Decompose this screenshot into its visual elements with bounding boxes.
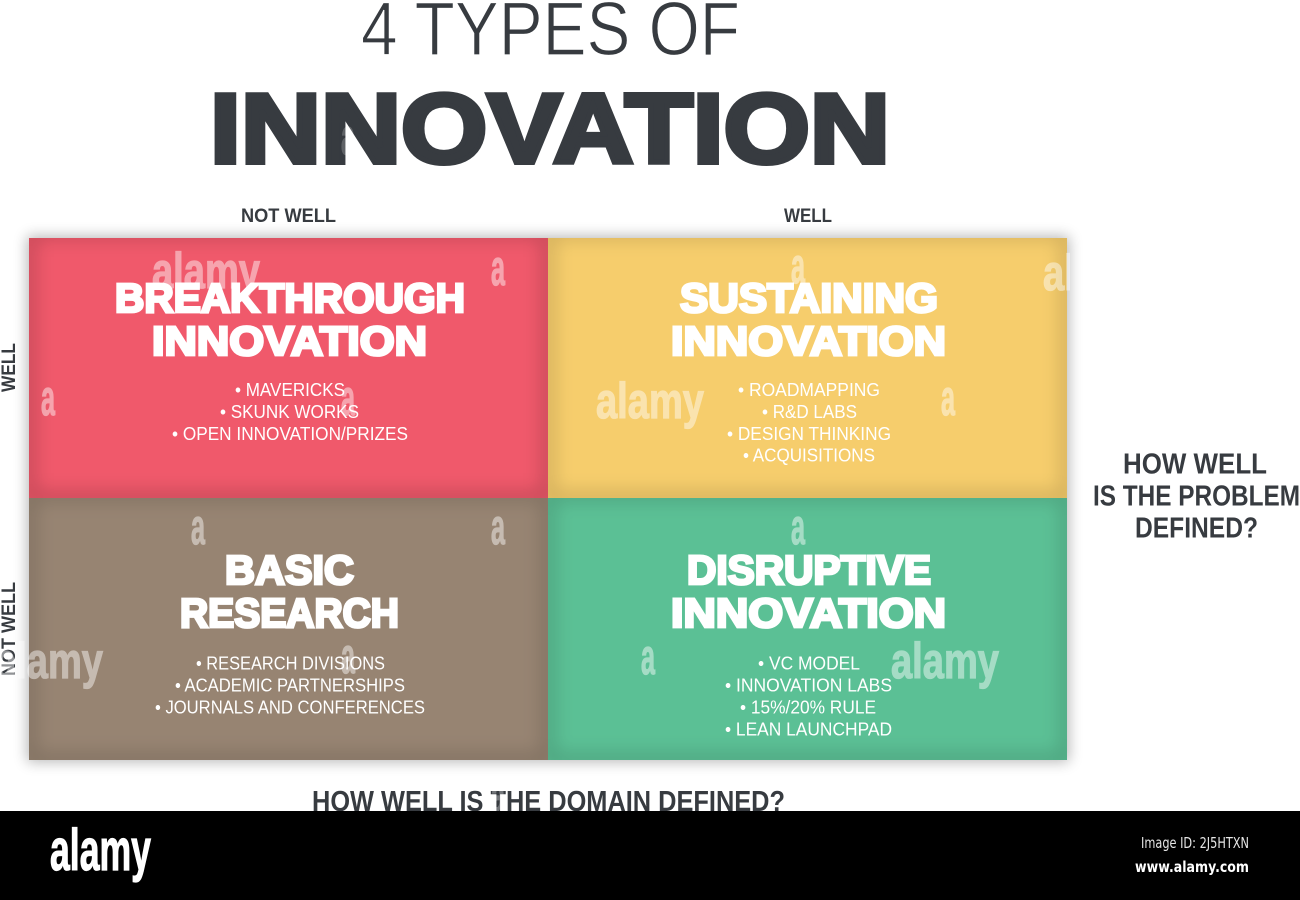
bullet list: breakthrough: • OPEN INNOVATION/PRIZES (172, 424, 408, 444)
bullet list: disruptive: • VC MODEL (758, 654, 860, 674)
stock watermarks: a (341, 109, 356, 165)
panel: breakthrough innovation (29, 232, 548, 498)
stock watermarks: a (491, 499, 506, 555)
heading: disruptive innovation (671, 547, 946, 636)
stock watermarks: a (941, 370, 956, 426)
bullet list: sustaining: • DESIGN THINKING (727, 424, 891, 444)
stock watermarks: a (791, 238, 806, 294)
matrix drop shadow (27, 236, 1069, 762)
footer logo: alamy (50, 818, 151, 883)
bullet list: sustaining (727, 380, 891, 466)
heading: basic research (180, 547, 399, 636)
heading: sustaining innovation: SUSTAINING (680, 275, 938, 321)
panel: sustaining innovation (548, 232, 1067, 498)
heading: breakthrough innovation: BREAKTHROUGH (115, 275, 465, 321)
heading: breakthrough innovation: INNOVATION (152, 318, 427, 364)
bullet list: sustaining: • R&D LABS (762, 402, 857, 422)
right axis question (1093, 448, 1300, 544)
stock watermarks: a (41, 370, 56, 426)
bullet list: disruptive: • LEAN LAUNCHPAD (725, 720, 892, 740)
heading: sustaining innovation (671, 275, 946, 364)
stock watermarks: alamy (1043, 245, 1151, 301)
heading: basic research: BASIC (225, 547, 354, 593)
bullet list: disruptive (725, 654, 892, 740)
stock watermarks: a (491, 240, 506, 296)
top axis label: well: WELL (784, 206, 832, 227)
bullet list: breakthrough: • SKUNK WORKS (220, 402, 359, 422)
bullet list: basic research: • RESEARCH DIVISIONS (196, 654, 385, 674)
right axis question: HOW WELL (1123, 448, 1267, 480)
top axis label: not well: NOT WELL (241, 206, 336, 227)
title line: innovation: INNOVATION (210, 74, 890, 184)
right axis question: DEFINED? (1135, 512, 1258, 544)
bullet list: sustaining: • ACQUISITIONS (743, 446, 875, 466)
stock watermarks: a (791, 499, 806, 555)
stock watermarks: a (641, 629, 656, 685)
heading: disruptive innovation: DISRUPTIVE (687, 547, 931, 593)
bullet list: disruptive: • 15%/20% RULE (740, 698, 876, 718)
stock watermarks: a (491, 767, 506, 823)
stock watermarks: alamy (596, 373, 704, 429)
stock watermarks: alamy (152, 243, 260, 299)
bullet list: basic research: • JOURNALS AND CONFERENCES (155, 698, 425, 718)
bullet list: basic research: • ACADEMIC PARTNERSHIPS (175, 676, 405, 696)
bullet list: sustaining: • ROADMAPPING (738, 380, 880, 400)
bullet list: breakthrough (172, 380, 408, 444)
image id: Image ID: 2J5HTXN (1141, 834, 1249, 852)
stock watermarks: alamy (891, 633, 999, 689)
bullet list: disruptive: • INNOVATION LABS (725, 676, 892, 696)
stock watermarks: a (191, 499, 206, 555)
stock watermarks: a (341, 370, 356, 426)
heading: breakthrough innovation (115, 275, 465, 364)
bottom axis question: HOW WELL IS THE DOMAIN DEFINED? (312, 786, 785, 818)
heading: disruptive innovation: INNOVATION (671, 590, 946, 636)
title (210, 0, 890, 184)
bullet list: breakthrough: • MAVERICKS (235, 380, 345, 400)
stock watermarks (2, 126, 1070, 811)
panel: basic research (29, 494, 548, 760)
footer band (0, 811, 1300, 900)
panel: disruptive innovation (548, 494, 1067, 760)
website: www.alamy.com (1135, 858, 1249, 876)
heading: sustaining innovation: INNOVATION (671, 318, 946, 364)
stock watermarks: a (341, 628, 356, 684)
bullet list: basic research (155, 654, 425, 718)
heading: basic research: RESEARCH (180, 590, 399, 636)
